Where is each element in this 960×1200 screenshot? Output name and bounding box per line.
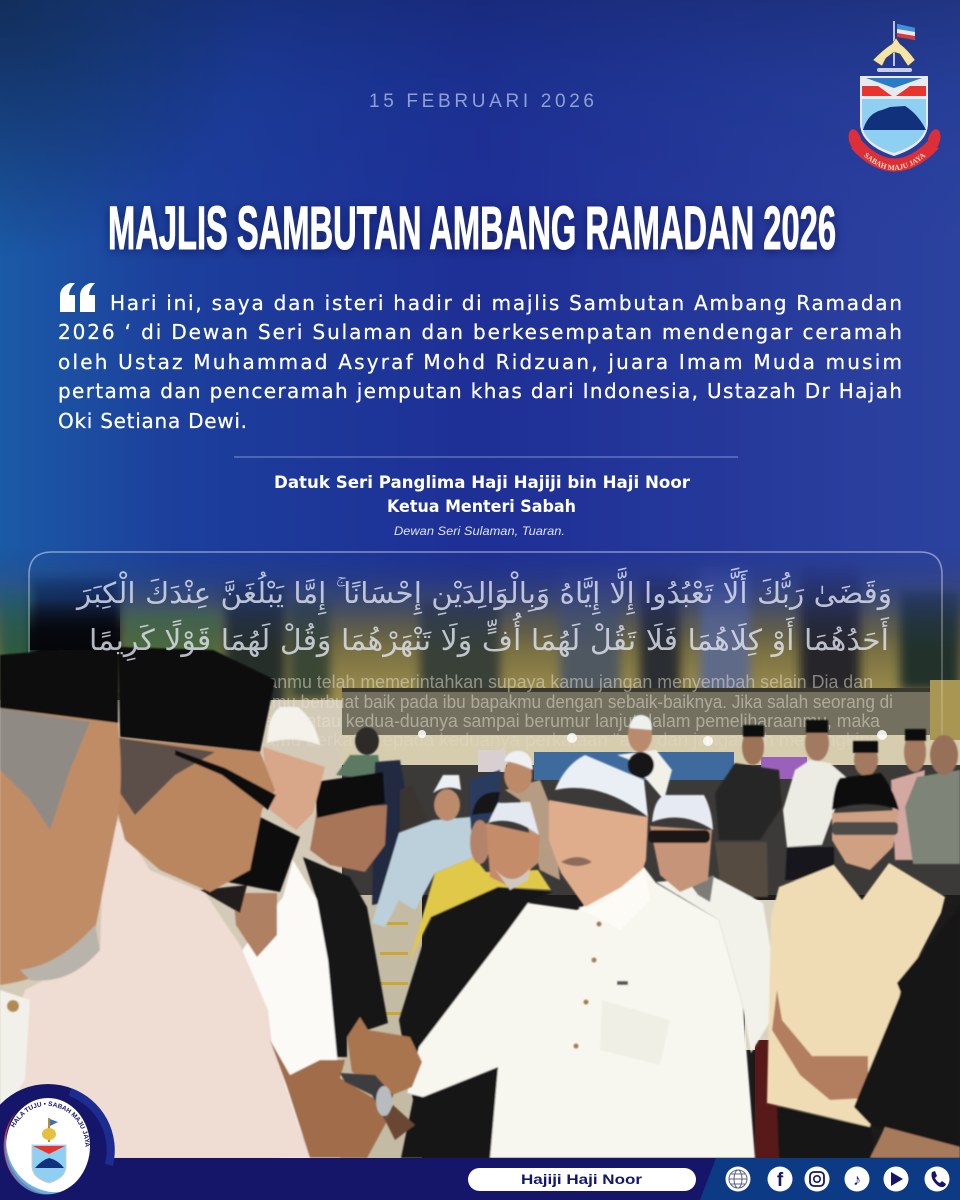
name pill (468, 1168, 696, 1191)
icon: phone (924, 1166, 950, 1192)
icon: facebook (768, 1166, 792, 1192)
guest with spectacles behind (648, 795, 777, 1053)
quote body text (58, 291, 902, 433)
white shirt guest (783, 760, 846, 847)
photo: crowd and handshake (0, 645, 960, 1160)
hands and watch (270, 1017, 422, 1158)
man with beige shirt (0, 647, 312, 1158)
translation text: Dan Tuhanmu telah memerintahkan supaya kamu jangan menyembah selain Dia dan (200, 672, 873, 692)
icon: tiktok (844, 1166, 870, 1192)
icon: website (726, 1166, 750, 1192)
quote body text: pertama dan penceramah jemputan khas dari Indonesia, Ustazah Dr Hajah (58, 379, 902, 403)
guest in cream shirt (767, 773, 945, 1158)
name pill: Hajiji Haji Noor (521, 1171, 643, 1187)
social icons (726, 1166, 950, 1192)
stairs and floor (342, 895, 422, 1158)
icon: quote mark (60, 283, 95, 312)
photo backdrop: trees and hall (0, 540, 960, 1160)
right guests (854, 744, 878, 776)
guest in black robe (399, 802, 553, 1158)
attribution: Datuk Seri Panglima Haji Hajiji bin Haji Noor (274, 473, 691, 492)
guest with white robe and cap (235, 707, 340, 1160)
Quranic verse in Arabic: أَحَدُهُمَا أَوْ كِلَاهُمَا فَلَا تَقُلْ لَهُمَا أُفٍّ وَلَا تَنْهَرْهُمَا وَقُلْ لَهُمَا قَوْلًا كَرِيمًا (89, 612, 890, 661)
ribbon (848, 129, 940, 172)
icon: facebook: f (777, 1170, 784, 1191)
background guests (336, 715, 960, 905)
bottom bar (0, 1158, 960, 1200)
lights (567, 733, 577, 743)
quote body text: oleh Ustaz Muhammad Asyraf Mohd Ridzuan, juara Imam Muda musim (58, 350, 902, 374)
quote body text: Oki Setiana Dewi. (58, 409, 247, 433)
quote body text: 2026 ‘ di Dewan Seri Sulaman dan berkesempatan mendengar ceramah (58, 320, 902, 344)
icon: Sabah coat of arms (848, 21, 940, 172)
quote body text: Hari ini, saya dan isteri hadir di majlis Sambutan Ambang Ramadan (110, 291, 902, 315)
attribution (274, 473, 691, 538)
Quranic verse in Arabic: وَقَضَىٰ رَبُّكَ أَلَّا تَعْبُدُوا إِلَّا إِيَّاهُ وَبِالْوَالِدَيْنِ إِحْسَانًا ۚ إِمَّا يَبْلُغَنَّ عِنْدَكَ الْكِبَرَ (75, 568, 892, 615)
hands (873, 38, 915, 66)
main figure in white (407, 755, 755, 1158)
trees (0, 572, 960, 700)
guest in light blue (372, 775, 474, 927)
attribution: Ketua Menteri Sabah (387, 497, 576, 516)
hall interior (342, 692, 930, 735)
translation text: janganlah kamu berkata kepada keduanya perkataan "ah", dan janganlah menengking (169, 730, 880, 750)
icon: tiktok: ♪ (853, 1172, 861, 1189)
translation text (169, 672, 893, 750)
ribbon: SABAH MAJU JAYA (864, 153, 926, 170)
date: 15 FEBRUARI 2026 (369, 91, 594, 112)
icon: video play (884, 1166, 908, 1192)
logo badge (0, 1084, 115, 1195)
partly hidden guest (200, 813, 300, 957)
guest in black with cap (303, 772, 388, 1057)
flag (894, 21, 915, 66)
dark shade above caps (30, 600, 120, 650)
black t-shirt guest (715, 763, 782, 840)
translation text: hendaklah kamu berbuat baik pada ibu bapakmu dengan sebaik-baiknya. Jika salah seorang di (170, 692, 893, 712)
lower floor fills (0, 700, 342, 1158)
translation text: antara keduanya atau kedua-duanya sampai berumur lanjut dalam pemeliharaanmu, maka (170, 711, 881, 731)
rounded frame outline (29, 552, 942, 800)
icon: instagram (804, 1166, 830, 1192)
logo badge: HALA TUJU • SABAH MAJU JAYA (10, 1101, 90, 1147)
shield (860, 76, 928, 156)
Quranic verse in Arabic (75, 568, 892, 661)
guest in yellow (409, 792, 551, 963)
man at far left (0, 645, 121, 1110)
foreground guest in black (854, 905, 960, 1158)
attribution: Dewan Seri Sulaman, Tuaran. (394, 524, 565, 538)
